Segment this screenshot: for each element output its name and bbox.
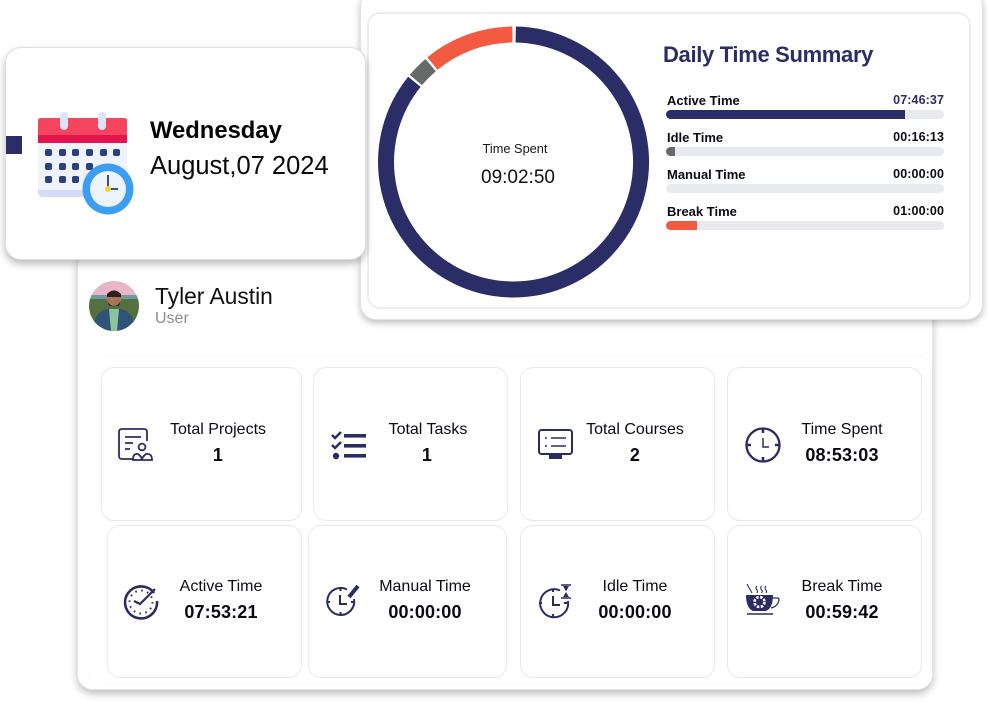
break time value: 01:00:00 — [893, 204, 944, 218]
inner frame — [367, 12, 971, 309]
stat: break time — [727, 525, 922, 678]
stat: idle time — [520, 525, 715, 678]
manual time value: 00:00:00 — [893, 167, 944, 181]
icon: active clock — [124, 585, 158, 620]
icon: manual clock with pencil — [326, 584, 360, 616]
label: Total Projects — [170, 421, 266, 438]
user role: User — [155, 310, 189, 327]
stat: total courses — [520, 367, 715, 521]
icon: coffee cup — [746, 584, 780, 615]
stat: total tasks — [313, 367, 508, 521]
donut label: Time Spent — [483, 141, 547, 156]
value: 07:53:21 — [184, 602, 258, 622]
value: 00:00:00 — [598, 602, 672, 622]
icon: courses — [538, 429, 573, 459]
icon: projects — [118, 428, 153, 461]
heading: Daily Time Summary — [663, 42, 873, 67]
icon: clock — [745, 427, 781, 463]
value: 2 — [630, 445, 640, 465]
date: August,07 2024 — [150, 152, 329, 180]
icon: tasks — [331, 431, 366, 460]
active time label: Active Time — [667, 93, 740, 108]
avatar: user photo — [89, 281, 139, 331]
user name: Tyler Austin — [155, 283, 273, 309]
weekday: Wednesday — [150, 117, 282, 144]
stat: time spent — [727, 367, 922, 521]
value: 08:53:03 — [805, 445, 879, 465]
panel: date — [5, 47, 366, 260]
idle time label: Idle Time — [667, 130, 723, 145]
icon: calendar with clock — [38, 112, 134, 214]
stat: total projects — [101, 367, 302, 521]
marker square — [6, 136, 22, 154]
idle time bar — [666, 147, 944, 156]
progress bars — [666, 93, 944, 230]
label: Total Courses — [586, 421, 684, 438]
value: 00:59:42 — [805, 602, 879, 622]
inner frame — [89, 355, 931, 685]
active time value: 07:46:37 — [893, 93, 944, 107]
break time label: Break Time — [667, 204, 737, 219]
label: Total Tasks — [389, 421, 467, 438]
panel: daily time summary — [360, 0, 983, 320]
break time bar — [666, 221, 944, 230]
icon: idle clock with hourglass — [539, 584, 571, 618]
label: Break Time — [802, 578, 882, 595]
value: 00:00:00 — [388, 602, 462, 622]
label: Idle Time — [603, 578, 667, 595]
label: Time Spent — [801, 421, 883, 438]
panel: user statistics — [77, 250, 933, 690]
idle time value: 00:16:13 — [893, 130, 944, 144]
label: Manual Time — [379, 578, 471, 595]
stat: active time — [107, 525, 302, 678]
label: Active Time — [180, 578, 262, 595]
donut chart: time spent — [378, 26, 650, 298]
value: 1 — [422, 445, 432, 465]
active time bar — [666, 110, 944, 119]
value: 1 — [213, 445, 223, 465]
manual time label: Manual Time — [667, 167, 746, 182]
stat: manual time — [308, 525, 507, 678]
manual time bar — [666, 184, 944, 193]
donut value: 09:02:50 — [481, 167, 555, 188]
